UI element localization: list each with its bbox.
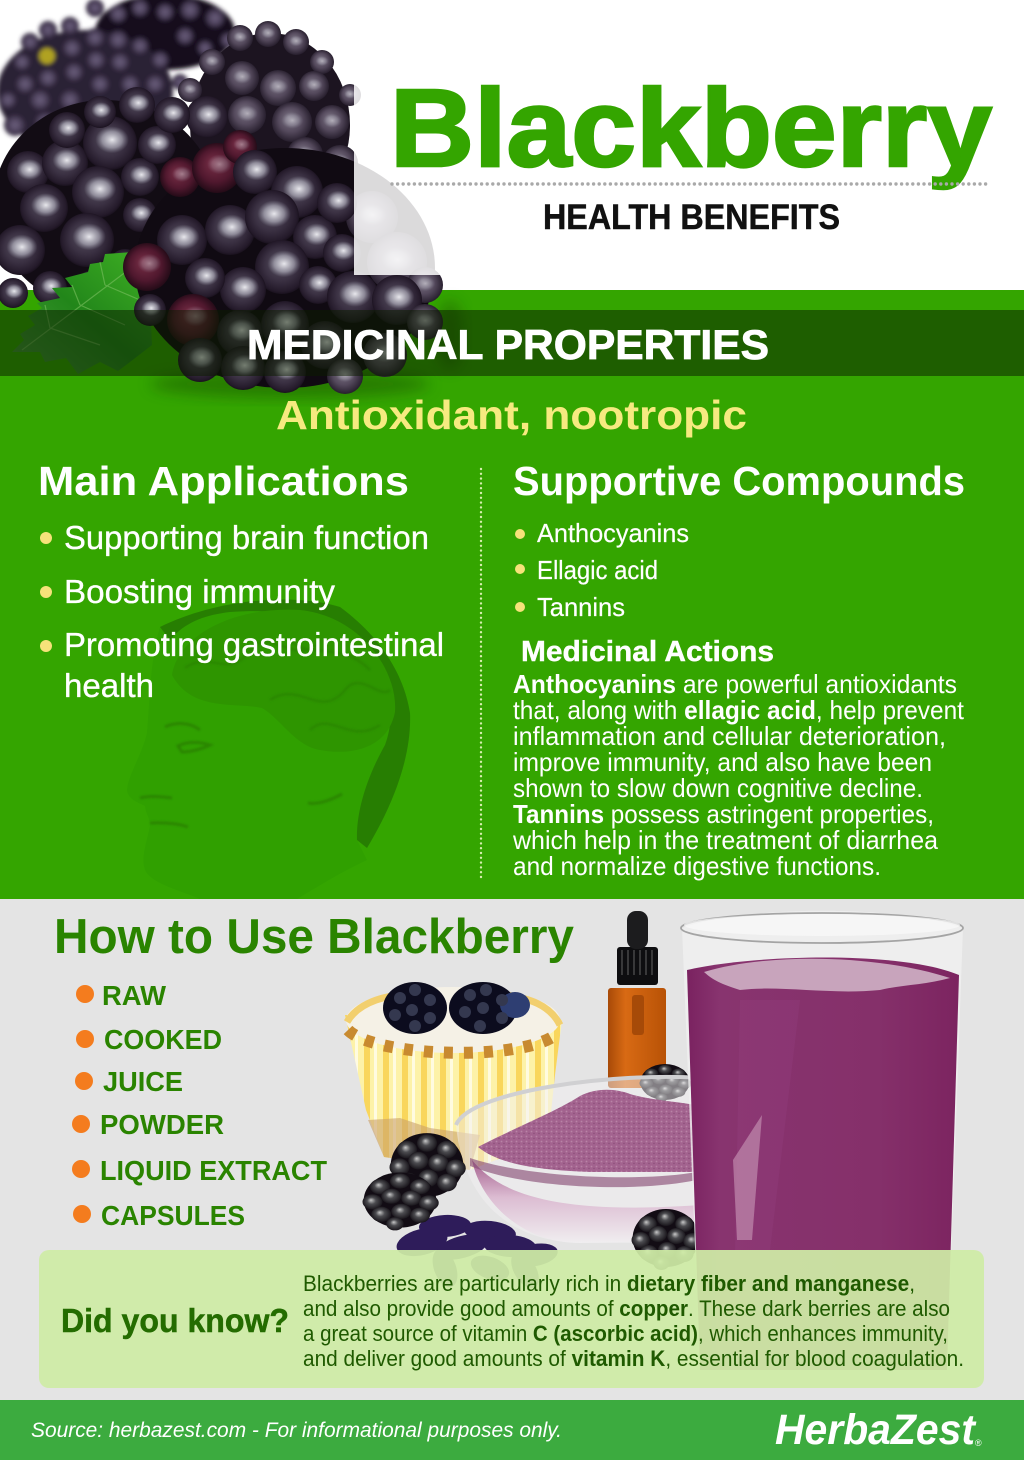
text: did you know fact: Blackberries are particularly rich in dietary fiber and manganese, xyxy=(303,1271,915,1296)
heading: medicinal actions: Medicinal Actions xyxy=(521,636,774,668)
heading: how to use blackberry: How to Use Blackberry xyxy=(54,910,574,964)
text: did you know fact: a great source of vitamin C (ascorbic acid), which enhances immunity, xyxy=(303,1321,948,1346)
list: applications xyxy=(40,519,444,704)
list: applications: health xyxy=(64,667,154,704)
heading: did you know: Did you know? xyxy=(61,1302,289,1339)
text: medicinal actions description: which help in the treatment of diarrhea xyxy=(512,825,939,855)
heading: main applications: Main Applications xyxy=(38,458,409,504)
text: did you know fact xyxy=(303,1271,964,1371)
text: medicinal actions description: that, along with ellagic acid, help prevent xyxy=(513,695,965,725)
list: uses: RAW xyxy=(102,980,167,1011)
logo: HerbaZest: ® xyxy=(975,1438,982,1448)
illustration: capsules xyxy=(394,1214,560,1293)
text: medicinal actions description xyxy=(512,669,965,881)
panel: main applications xyxy=(38,458,444,704)
list: uses: COOKED xyxy=(104,1024,222,1055)
text: medicinal actions description: and normalize digestive functions. xyxy=(513,851,881,881)
list: compounds: Tannins xyxy=(537,592,625,622)
text: medicinal actions description: inflammation and cellular deterioration, xyxy=(513,721,946,751)
text: medicinal actions description: shown to slow down cognitive decline. xyxy=(513,773,923,803)
text: did you know fact: and deliver good amounts of vitamin K, essential for blood coagulation. xyxy=(303,1346,964,1371)
panel: medicinal properties background xyxy=(0,290,1024,899)
illustration: blackberries xyxy=(0,0,464,398)
text: medicinal actions description: Tannins possess astringent properties, xyxy=(513,799,934,829)
footer xyxy=(0,1400,1024,1460)
text: did you know fact: and also provide good amounts of copper. These dark berries are also xyxy=(303,1296,950,1321)
list: compounds: Anthocyanins xyxy=(537,518,689,548)
panel: did you know xyxy=(39,1250,984,1388)
list: uses: POWDER xyxy=(100,1109,224,1140)
illustration: small blackberries xyxy=(362,1133,702,1270)
title: Blackberry: Blackberry xyxy=(390,67,992,190)
list: applications: Promoting gastrointestinal xyxy=(64,626,444,663)
list: applications: Supporting brain function xyxy=(64,519,429,556)
panel: supportive compounds xyxy=(512,458,965,881)
banner: medicinal properties xyxy=(0,310,1024,376)
column divider xyxy=(480,469,482,880)
list: applications: Boosting immunity xyxy=(64,573,336,610)
heading: supportive compounds: Supportive Compounds xyxy=(513,458,965,504)
illustration: glass of juice xyxy=(681,911,963,1370)
list: uses: JUICE xyxy=(103,1066,183,1097)
logo: HerbaZest: HerbaZest xyxy=(775,1406,977,1454)
illustration: powder bowl xyxy=(456,1064,700,1243)
source note: Source: herbazest.com - For informational purposes only. xyxy=(31,1419,562,1442)
list: uses: LIQUID EXTRACT xyxy=(100,1155,327,1186)
panel: how to use background xyxy=(0,899,1024,1400)
illustration: cheesecake xyxy=(345,982,562,1170)
text: medicinal actions description: improve immunity, and also have been xyxy=(513,747,932,777)
text: medicinal actions description: Anthocyanins are powerful antioxidants xyxy=(513,669,957,699)
subtitle: health benefits: HEALTH BENEFITS xyxy=(543,198,840,237)
illustration: dropper bottle xyxy=(608,911,666,1088)
list: uses xyxy=(72,980,327,1231)
banner: medicinal properties: MEDICINAL PROPERTIES xyxy=(247,321,769,368)
illustration: head with brain xyxy=(127,600,410,899)
dotted divider xyxy=(392,182,988,186)
list: compounds xyxy=(515,518,689,622)
list: compounds: Ellagic acid xyxy=(537,555,658,585)
subheading: antioxidant, nootropic: Antioxidant, nootropic xyxy=(276,392,747,438)
list: uses: CAPSULES xyxy=(101,1200,245,1231)
